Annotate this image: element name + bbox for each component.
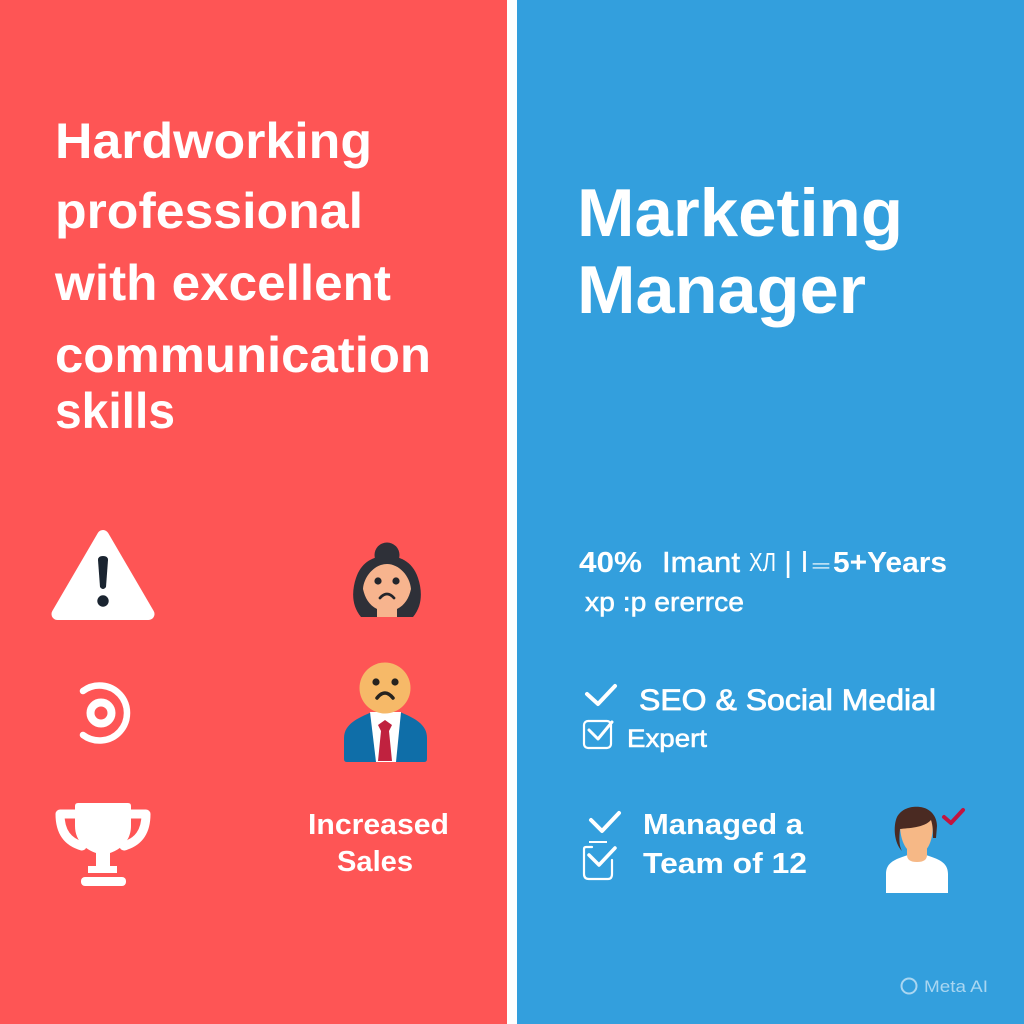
heading: left vague statement: professional	[55, 183, 363, 239]
heading: left vague statement: with excellent	[54, 255, 391, 311]
icon: target	[83, 686, 127, 740]
list item: managed a team of 12	[584, 809, 807, 880]
text: increased sales: Sales	[337, 846, 413, 878]
watermark: Meta AI: Meta AI	[924, 977, 988, 996]
icon: unhappy woman	[353, 542, 421, 617]
text: garbled experience statistics	[579, 547, 947, 617]
icon: trophy	[60, 803, 146, 886]
heading: left vague statement: skills	[55, 383, 175, 439]
icon: warning triangle	[58, 536, 148, 614]
text: garbled experience statistics: 40%	[579, 547, 642, 579]
text: garbled experience statistics: | l	[784, 547, 808, 579]
heading: left vague statement: Hardworking	[55, 113, 372, 169]
list item: SEO and social media: Expert	[627, 725, 707, 753]
heading: marketing manager: Marketing	[577, 175, 903, 251]
text: garbled experience statistics: XЛ	[749, 547, 776, 577]
text: garbled experience statistics: Imant	[662, 547, 740, 579]
panel: blue right	[517, 0, 1024, 1024]
text: increased sales	[308, 809, 449, 878]
watermark: Meta AI	[902, 977, 988, 996]
list item: managed a team of 12: Team of 12	[643, 848, 807, 880]
heading: marketing manager: Manager	[577, 252, 866, 328]
text: garbled experience statistics: xp :p ererrce	[585, 587, 744, 617]
text: garbled experience statistics: 5+Years	[833, 547, 947, 579]
heading: left vague statement: communication	[55, 327, 431, 383]
list item: managed a team of 12: Managed a	[643, 809, 804, 841]
heading: marketing manager	[577, 175, 903, 328]
panel: red left	[0, 0, 507, 1024]
list item: SEO and social media	[584, 684, 936, 753]
text: increased sales: Increased	[308, 809, 449, 841]
icon: person with check	[886, 807, 963, 893]
list item: SEO and social media: SEO & Social Medial	[639, 684, 936, 717]
heading: left vague statement	[54, 113, 431, 439]
icon: unhappy businessman	[344, 662, 427, 762]
text: garbled experience statistics: =	[811, 558, 831, 575]
